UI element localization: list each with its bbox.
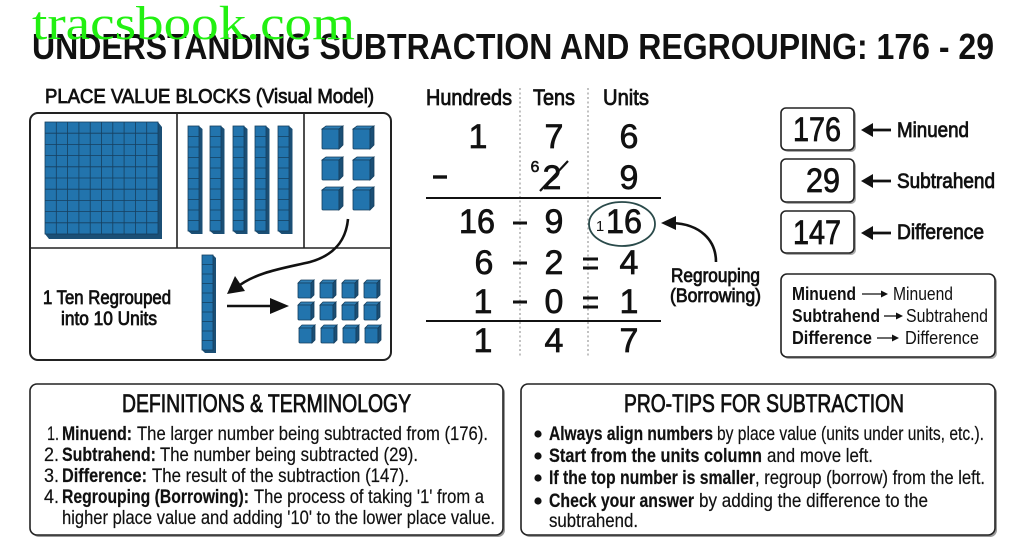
definition 2: The number being subtracted (29). xyxy=(160,444,418,466)
definitions heading: DEFINITIONS & TERMINOLOGY xyxy=(122,390,411,418)
tip 2: Start from the units column xyxy=(549,445,762,467)
panel: term mapping: Subtrahend xyxy=(792,305,880,326)
minuend box: 176 xyxy=(793,111,841,149)
twelve small unit cubes xyxy=(298,280,381,343)
tip 2: and move left. xyxy=(767,445,873,467)
subtrahend box xyxy=(781,159,856,204)
panel: term mapping: Difference xyxy=(792,327,872,348)
row: answer: 1 xyxy=(474,322,492,360)
row: 6 minus 2 xyxy=(475,244,638,282)
tip 4: by adding the difference to the xyxy=(699,490,928,512)
panel: term mapping: Minuend xyxy=(893,283,953,304)
definition 4: Regrouping (Borrowing): xyxy=(62,486,249,508)
row: 6 minus 2: 6 xyxy=(475,244,493,282)
panel: term mapping xyxy=(781,274,997,359)
hundreds block xyxy=(45,122,162,239)
column headers: Units xyxy=(603,85,649,110)
tip 4: Check your answer xyxy=(549,490,694,512)
row: 16 minus 9: 16 xyxy=(459,203,495,241)
definition 2: 2. xyxy=(44,444,59,466)
regrouped ten rod xyxy=(202,255,216,353)
row: 1 minus 0: 0 xyxy=(545,283,563,321)
tip 3: If the top number is smaller xyxy=(549,467,755,489)
five tens rods xyxy=(188,126,292,234)
definition 4: higher place value and adding '10' to the lower place value. xyxy=(62,507,495,529)
row: minuend: 1 xyxy=(469,118,487,156)
subtrahend label with arrow xyxy=(861,170,995,193)
row: 16 minus 9: 1 xyxy=(596,218,604,235)
row: answer: 4 xyxy=(545,322,563,360)
minuend label with arrow xyxy=(861,119,969,142)
regrouping circle xyxy=(589,202,655,246)
definition 4: 4. xyxy=(44,486,59,508)
row: 1 minus 0: 1 xyxy=(620,283,638,321)
row: minuend xyxy=(469,118,638,156)
tip 4: subtrahend. xyxy=(549,510,638,532)
row: 1 minus 0 xyxy=(474,283,638,321)
panel: term mapping: Minuend xyxy=(792,283,856,304)
difference box xyxy=(781,211,856,255)
difference label with arrow: Difference xyxy=(897,221,984,244)
pro-tips heading: PRO-TIPS FOR SUBTRACTION xyxy=(624,390,904,418)
definition 2: Subtrahend: xyxy=(62,444,156,466)
regroup caption: into 10 Units xyxy=(61,309,157,330)
panel: pro-tips xyxy=(521,384,997,537)
tip 1: Always align numbers xyxy=(549,423,713,445)
definition 4 xyxy=(44,486,495,529)
subtrahend label with arrow: Subtrahend xyxy=(897,170,995,193)
tip 4 xyxy=(534,490,928,532)
row: subtrahend with crossed digit: 2 xyxy=(543,159,561,197)
definition 3: The result of the subtraction (147). xyxy=(152,465,409,487)
definition 3: Difference: xyxy=(62,465,147,487)
row: 16 minus 9: 9 xyxy=(545,203,563,241)
row: subtrahend with crossed digit: 6 xyxy=(531,159,540,176)
definition 1: The larger number being subtracted from (176). xyxy=(137,423,488,445)
row: minuend: 7 xyxy=(545,118,563,156)
definition 3 xyxy=(44,465,409,487)
panel: place value blocks xyxy=(30,113,391,360)
tip 3 xyxy=(534,467,985,489)
row: 16 minus 9: 16 xyxy=(606,203,642,241)
row: 16 minus 9 xyxy=(459,203,642,241)
arrow to units xyxy=(227,298,289,314)
subtraction working xyxy=(426,85,661,360)
panel: term mapping: Subtrahend xyxy=(906,305,988,326)
definition 2 xyxy=(44,444,418,466)
column headers xyxy=(426,85,649,110)
definition 3: 3. xyxy=(44,465,59,487)
row: subtrahend with crossed digit: 9 xyxy=(620,159,638,197)
column headers: Tens xyxy=(533,85,575,110)
difference label with arrow xyxy=(861,221,984,244)
regroup caption xyxy=(43,288,171,330)
definition 4: The process of taking '1' from a xyxy=(254,486,484,508)
tip 3: , regroup (borrow) from the left. xyxy=(755,467,985,489)
regroup caption: 1 Ten Regrouped xyxy=(43,288,171,309)
tip 1 xyxy=(534,423,984,445)
row: 6 minus 2: 2 xyxy=(545,244,563,282)
six unit cubes xyxy=(322,126,374,210)
row: 6 minus 2: 4 xyxy=(620,244,638,282)
row: subtrahend with crossed digit xyxy=(433,159,638,197)
regrouping label: Regrouping xyxy=(671,266,760,287)
regrouping label xyxy=(670,266,761,307)
subtrahend box: 29 xyxy=(806,162,840,200)
regrouping label: (Borrowing) xyxy=(670,286,761,307)
row: answer: 7 xyxy=(620,322,638,360)
minuend label with arrow: Minuend xyxy=(897,119,969,142)
difference box: 147 xyxy=(793,214,841,252)
row: answer xyxy=(474,322,638,360)
panel: term mapping: Difference xyxy=(905,327,979,348)
minuend box xyxy=(781,108,856,152)
panel: definitions xyxy=(30,384,505,537)
column headers: Hundreds xyxy=(426,85,512,110)
curved arrow to rod xyxy=(227,219,348,294)
definition 1: 1. xyxy=(47,423,59,445)
heading: place value blocks: PLACE VALUE BLOCKS (Visual Model) xyxy=(45,86,374,108)
definition 1: Minuend: xyxy=(62,423,132,445)
arrow: regrouping xyxy=(661,216,716,262)
row: 1 minus 0: 1 xyxy=(474,283,492,321)
row: minuend: 6 xyxy=(620,118,638,156)
